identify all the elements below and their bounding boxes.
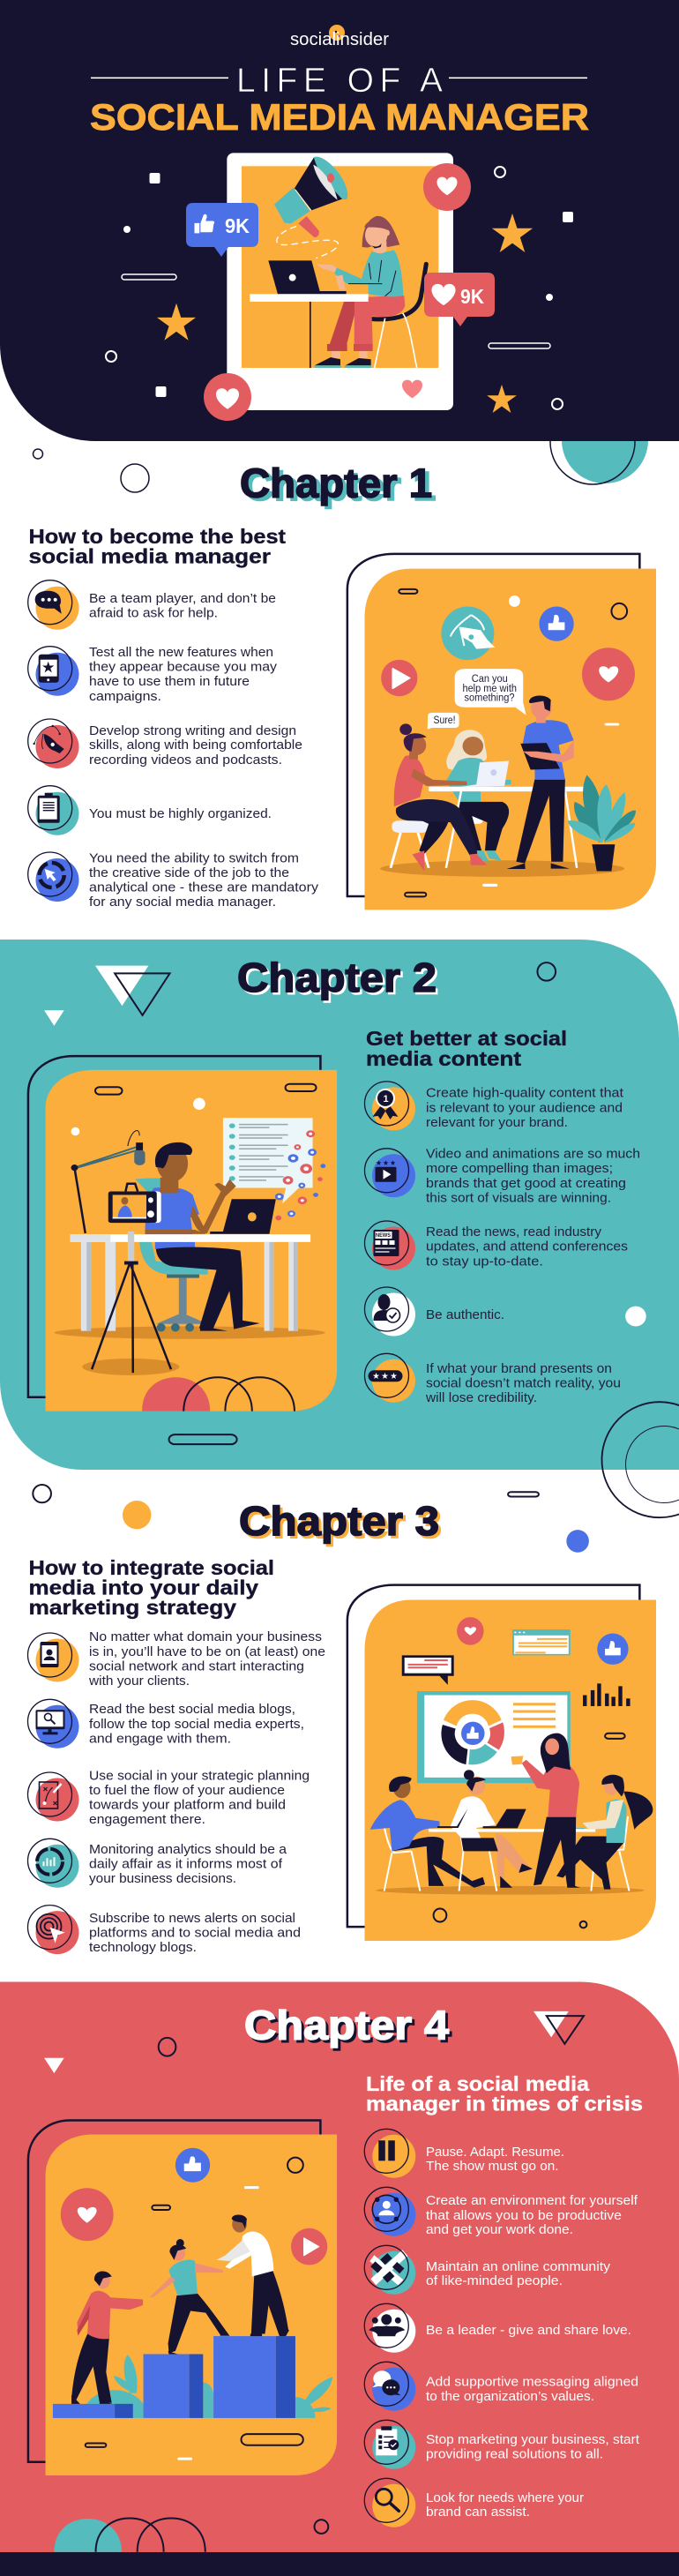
- tip 1 text: [89, 591, 276, 620]
- tip 5 text: for any social media manager.: [89, 895, 276, 910]
- chair: [135, 1178, 208, 1331]
- tip 5 text: platforms and to social media and: [89, 1925, 301, 1941]
- tip 3 text: Read the news, read industry: [426, 1224, 601, 1239]
- heading: Chapter 4: Chapter 4: [247, 2004, 451, 2050]
- hero panel background: [0, 0, 679, 441]
- tip 1 text: is relevant to your audience and: [426, 1100, 623, 1115]
- decoration: big arcs: [601, 1402, 679, 1517]
- section heading chapter 4: [366, 2072, 643, 2115]
- figure right: [217, 2215, 289, 2336]
- section heading chapter 2: Get better at social: [366, 1027, 567, 1050]
- desk top: [71, 1234, 310, 1242]
- legs: [330, 302, 354, 344]
- tip 5 text: Add supportive messaging aligned: [426, 2375, 638, 2389]
- tip 5 text: [426, 2375, 638, 2404]
- tip 6 text: providing real solutions to all.: [426, 2447, 603, 2461]
- section heading chapter 1: How to become the best: [28, 525, 286, 548]
- tip 1 text: No matter what domain your business: [89, 1629, 322, 1644]
- section heading chapter 1: social media manager: [28, 545, 271, 568]
- tip 2 text: [426, 1147, 640, 1205]
- microphone: [71, 1131, 146, 1233]
- tip 2 icon: phone: [28, 647, 79, 696]
- icon: heart bubble 9K: [424, 273, 495, 326]
- tip 4 icon: leader group: [364, 2303, 415, 2353]
- section heading chapter 1: [28, 525, 286, 568]
- tip 2 text: Create an environment for yourself: [426, 2193, 638, 2208]
- tip 1 text: Be a team player, and don’t be: [89, 591, 276, 606]
- illustration: content creator at desk: [28, 1056, 337, 1412]
- tip 4 icon: clipboard: [28, 786, 79, 835]
- sweater and arm: [334, 250, 403, 296]
- tip 1 icon: chat: [28, 580, 79, 630]
- chair: [373, 264, 426, 319]
- illustration: team meeting: [347, 1585, 656, 1941]
- tip 7 icon: magnifier: [364, 2478, 415, 2527]
- blue shirt man: [370, 1776, 485, 1891]
- tip 2 text: and engage with them.: [89, 1731, 231, 1746]
- title: SOCIAL MEDIA MANAGER: [90, 96, 589, 138]
- tip 3 text: Maintain an online community: [426, 2259, 611, 2274]
- tip 1 text: [426, 1086, 624, 1130]
- icon: bars: [583, 1683, 630, 1706]
- tip 3 text: Develop strong writing and design: [89, 723, 296, 738]
- icon: pen tool circle: [441, 606, 495, 660]
- tip 1 text: is in, you’ll have to be on (at least) one: [89, 1644, 325, 1659]
- whiteboard with donut chart: [417, 1691, 571, 1783]
- tip 1 text: Create high-quality content that: [426, 1086, 624, 1101]
- tip 3 text: to stay up-to-date.: [426, 1254, 543, 1269]
- tip 3 text: [426, 1224, 628, 1269]
- icon: small pink heart: [402, 380, 422, 398]
- tip 7 text: [426, 2490, 584, 2520]
- tip 7 text: Look for needs where your: [426, 2490, 584, 2505]
- tip 1 text: Pause. Adapt. Resume.: [426, 2145, 564, 2160]
- tip 5 text: If what your brand presents on: [426, 1361, 612, 1376]
- icon: browser window: [512, 1629, 571, 1655]
- tip 3 icon: news: NEWS: [376, 1232, 392, 1239]
- standing presenter: [511, 1734, 580, 1888]
- section heading chapter 3: How to integrate social: [28, 1556, 274, 1579]
- tip 3 icon: community hands: [364, 2245, 415, 2295]
- plant: [568, 775, 636, 871]
- camera on tripod: [92, 1184, 171, 1373]
- desk: [250, 294, 369, 302]
- tip 2 text: have to use them in future: [89, 674, 250, 689]
- icon: heart circle: [457, 1617, 484, 1645]
- laptop: [459, 760, 509, 787]
- section heading chapter 3: marketing strategy: [28, 1596, 236, 1619]
- white shirt woman: [451, 1770, 533, 1891]
- tip 5 text: [89, 850, 319, 910]
- teal plant: [86, 2355, 332, 2418]
- tip 6 text: Stop marketing your business, start: [426, 2432, 640, 2447]
- figure middle: [149, 2239, 230, 2354]
- section heading chapter 3: [28, 1556, 274, 1619]
- title: LIFE OF A: [236, 62, 443, 100]
- icon: like bubble 9K: [186, 203, 258, 257]
- tip 2 icon: video: [365, 1149, 415, 1197]
- tip 3 text: [89, 1768, 310, 1827]
- speech bubbles: [428, 669, 526, 730]
- tip 4 icon: analytics ring: [28, 1838, 79, 1888]
- icon: like circle: [175, 2148, 210, 2183]
- tip 1 icon: badge: 1: [383, 1094, 389, 1105]
- logo: socialinsider: socialinsider: [290, 30, 389, 49]
- creator figure: [146, 1142, 260, 1331]
- table: [429, 787, 586, 868]
- icon: play circle: [381, 660, 417, 696]
- tip 1 text: with your clients.: [88, 1674, 190, 1689]
- heading: Chapter 4: Chapter 4: [244, 2003, 449, 2048]
- tip 4 text: You must be highly organized.: [89, 806, 272, 821]
- tip 5 text: You need the ability to switch from: [89, 850, 299, 866]
- tip 3 text: updates, and attend conferences: [426, 1239, 628, 1254]
- figure left: [71, 2272, 143, 2404]
- tip 2 text: and get your work done.: [426, 2222, 573, 2237]
- speech text: Can you help me with something?: help me with: [462, 684, 517, 694]
- tip 4 text: your business decisions.: [89, 1871, 236, 1886]
- tip 2 text: Read the best social media blogs,: [89, 1702, 295, 1717]
- tip 2 icon: monitor search: [28, 1699, 79, 1749]
- tip 4 text: Be authentic.: [426, 1307, 504, 1322]
- icon: heart circle: [61, 2188, 114, 2241]
- tip 3 text: recording videos and podcasts.: [89, 753, 282, 768]
- icon: like bubble 9K: 9K: [225, 214, 250, 237]
- panel: chapter 2 background: [0, 940, 679, 1470]
- tip 1 text: [426, 2145, 564, 2174]
- tip 1 text: relevant for your brand.: [426, 1115, 568, 1130]
- tip 2 icon: person in circle: [364, 2187, 415, 2236]
- tip 2 text: more compelling than images;: [426, 1161, 613, 1176]
- tip 1 icon: badge: [365, 1082, 415, 1130]
- illustration: photo frame with woman and megaphone: [227, 153, 453, 410]
- man standing: [507, 696, 574, 869]
- tip 7 text: brand can assist.: [426, 2505, 530, 2520]
- tip 1 icon: pause: [364, 2129, 415, 2178]
- laptop: [210, 1199, 276, 1234]
- tip 2 text: they appear because you may: [89, 660, 278, 675]
- tip 5 text: analytical one - these are mandatory: [89, 880, 319, 895]
- heading: Chapter 1: Chapter 1: [243, 463, 436, 509]
- heading: Chapter 1: Chapter 1: [240, 461, 432, 506]
- icon: heart circle top right: [423, 163, 471, 211]
- tip 5 text: the creative side of the job to the: [89, 865, 289, 880]
- tip 5 icon: refresh: [28, 852, 79, 902]
- heading: Chapter 3: Chapter 3: [239, 1498, 439, 1544]
- tip 3 text: engagement there.: [89, 1812, 205, 1827]
- tip 3 text: towards your platform and build: [89, 1798, 286, 1813]
- laptop: [268, 260, 347, 294]
- tip 2 text: that allows you to be productive: [426, 2208, 622, 2223]
- section heading chapter 4: manager in times of crisis: [366, 2093, 643, 2115]
- tip 5 text: Subscribe to news alerts on social: [89, 1911, 295, 1926]
- tip 3 icon: pen tool: [28, 719, 79, 768]
- tip 5 text: will lose credibility.: [425, 1390, 537, 1405]
- speech text: Can you help me with something?: something?: [464, 693, 515, 704]
- section heading chapter 2: [366, 1027, 567, 1070]
- tip 4 text: daily affair as it informs most of: [89, 1857, 283, 1872]
- tip 5 text: [425, 1361, 621, 1405]
- woman center: [446, 730, 511, 863]
- tip 3 text: skills, along with being comfortable: [89, 738, 302, 753]
- tip 1 icon: phone profile: [28, 1633, 79, 1681]
- tip 2 text: [426, 2193, 638, 2237]
- icon: heart circle bottom: [204, 373, 251, 421]
- speech text: Can you help me with something?: Sure!: [434, 715, 455, 726]
- footer bar: [0, 2552, 679, 2576]
- decorative circles chapter 1: [34, 449, 149, 492]
- tip 1 text: [88, 1629, 325, 1689]
- tip 2 text: Video and animations are so much: [426, 1147, 640, 1161]
- tip 2 text: [89, 1702, 304, 1746]
- tip 4 text: Monitoring analytics should be a: [89, 1842, 287, 1857]
- teal vest woman: [556, 1775, 653, 1891]
- laptops and table: [429, 1808, 595, 1832]
- icon: heart circle: [582, 648, 635, 700]
- tip 1 text: The show must go on.: [426, 2159, 559, 2174]
- tip 5 icon: rating: [365, 1353, 415, 1403]
- tip 2 text: follow the top social media experts,: [89, 1717, 304, 1732]
- title: [90, 62, 589, 138]
- blocks: [53, 2336, 295, 2418]
- tip 5 text: [89, 1911, 301, 1955]
- speech text: Can you help me with something?: [434, 674, 517, 726]
- tip 3 text: [89, 723, 302, 768]
- tip 3 icon: strategy board: [28, 1772, 79, 1821]
- tip 3 text: of like-minded people.: [426, 2273, 563, 2288]
- tip 6 text: [426, 2432, 640, 2461]
- icon: play circle: [291, 2228, 327, 2265]
- section heading chapter 3: media into your daily: [28, 1576, 258, 1599]
- hero decorations: [106, 167, 573, 413]
- tip 5 icon: supportive message: [364, 2362, 415, 2411]
- tip 4 icon: verified user: [365, 1287, 415, 1336]
- icon: like circle: [539, 606, 574, 641]
- icon: heart bubble 9K: 9K: [460, 285, 484, 308]
- tip 3 text: to fuel the flow of your audience: [89, 1783, 285, 1798]
- heading: Chapter 2: Chapter 2: [237, 955, 436, 1000]
- illustration: team discussion: [347, 554, 656, 910]
- decoration: triangles chapter 2: [44, 962, 646, 1444]
- heading: Chapter 2: Chapter 2: [240, 956, 439, 1002]
- head: [362, 216, 399, 248]
- tip 2 text: [89, 645, 278, 704]
- illustration: teamwork steps: [28, 2121, 337, 2475]
- woman left: [391, 723, 487, 871]
- speech text: Can you help me with something?: Can you: [472, 674, 508, 685]
- tip 3 icon: news: [365, 1221, 415, 1270]
- panel: chapter 4 background: [0, 1981, 679, 2552]
- tip 2 text: brands that get good at creating: [426, 1176, 626, 1191]
- tip 3 text: [426, 2259, 611, 2288]
- tip 2 text: Test all the new features when: [89, 645, 273, 660]
- desk legs: [81, 1242, 298, 1331]
- icon: like circle: [597, 1634, 629, 1665]
- icon: chat bubble: [402, 1655, 454, 1685]
- tip 1 text: afraid to ask for help.: [89, 605, 218, 620]
- tip 2 text: campaigns.: [89, 689, 161, 704]
- decorative teal blob under hero: [550, 397, 648, 484]
- decoration chapter 4: [44, 2011, 584, 2552]
- tip 5 icon: target cursor: [28, 1906, 79, 1954]
- tip 1 text: social network and start interacting: [89, 1659, 304, 1674]
- tip 4 text: [89, 1842, 287, 1886]
- tip 3 text: Use social in your strategic planning: [89, 1768, 310, 1784]
- tip 4 text: Be a leader - give and share love.: [426, 2323, 631, 2338]
- tip 5 text: social doesn’t match reality, you: [426, 1376, 621, 1391]
- tip 2 text: this sort of visuals are winning.: [426, 1190, 611, 1205]
- reaction bubbles: [275, 1130, 325, 1220]
- decoration chapter 3: [33, 1485, 589, 1553]
- section heading chapter 4: Life of a social media: [366, 2072, 590, 2095]
- section heading chapter 2: media content: [366, 1047, 521, 1070]
- heading: Chapter 3: Chapter 3: [242, 1501, 442, 1546]
- tip 5 text: technology blogs.: [89, 1940, 197, 1955]
- tip 6 icon: checklist: [364, 2420, 415, 2469]
- megaphone: [274, 157, 347, 237]
- chat list bubble: [223, 1118, 313, 1203]
- tip 5 text: to the organization’s values.: [426, 2389, 594, 2404]
